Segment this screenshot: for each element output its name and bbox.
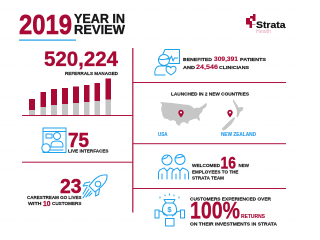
bar chart [29, 78, 111, 115]
benefited text: AND [183, 65, 196, 71]
icon: rocket [83, 175, 107, 198]
returns text: CUSTOMERS EXPERIENCED OVER [190, 196, 272, 202]
benefited text: 309,391 [214, 57, 239, 63]
go lives text: CARESTREAM GO LIVES [27, 195, 82, 200]
referrals number: 520,224 [44, 48, 118, 71]
title: YEAR IN [74, 12, 125, 26]
go lives text: WITH [28, 201, 42, 206]
returns text: ON THEIR INVESTMENTS IN STRATA [190, 222, 278, 228]
benefited text [183, 57, 267, 71]
label: New Zealand: NEW ZEALAND [221, 132, 256, 138]
employees text [192, 154, 249, 181]
panel: live interfaces [42, 128, 108, 154]
label: USA: USA [158, 132, 168, 138]
go lives text: CUSTOMERS [52, 201, 82, 206]
employees text: 16 [220, 154, 236, 172]
icon: interface screen [42, 128, 66, 152]
panel: go lives [27, 175, 107, 208]
map: USA [160, 102, 207, 126]
icon: pin New Zealand [227, 110, 233, 118]
title: REVIEW [74, 23, 125, 37]
title [19, 9, 125, 40]
benefited text: CLINICIANS [219, 65, 250, 71]
countries heading: LAUNCHED IN 2 NEW COUNTRIES [171, 92, 250, 98]
title: 2019 [19, 9, 72, 40]
employees text: NEW [238, 163, 249, 169]
map: New Zealand [222, 99, 244, 130]
icon: two employees [158, 154, 188, 179]
go lives text [27, 195, 82, 208]
returns text [190, 196, 278, 228]
employees text: EMPLOYEES TO THE [192, 169, 239, 175]
benefited text: PATIENTS [240, 57, 267, 63]
benefited text: BENEFITED [183, 57, 213, 63]
benefited text: 24,546 [196, 65, 219, 71]
returns text: 100% [190, 198, 240, 224]
panel: returns [155, 194, 278, 228]
panel: new employees [158, 154, 249, 181]
icon: caregiver with heart and monitor [155, 50, 180, 75]
returns text: RETURNS [241, 214, 265, 220]
logo: Strata Health: Health [256, 29, 271, 35]
interfaces label: LIVE INTERFACES [68, 148, 108, 154]
icon: pin USA [178, 110, 184, 118]
employees text: WELCOMED [192, 163, 221, 169]
panel: new countries [158, 92, 256, 138]
go lives text: 10 [43, 201, 51, 208]
panel: benefited [155, 50, 267, 75]
employees text: STRATA TEAM [192, 175, 224, 181]
logo: Strata Health: Strata [256, 20, 286, 31]
go lives number: 23 [60, 176, 82, 198]
icon: hands holding money bag: $ [167, 205, 172, 214]
referrals label: REFERRALS MANAGED [65, 71, 119, 76]
panel: referrals [29, 48, 119, 115]
interfaces number: 75 [68, 130, 89, 152]
logo: Strata Health [246, 14, 286, 35]
